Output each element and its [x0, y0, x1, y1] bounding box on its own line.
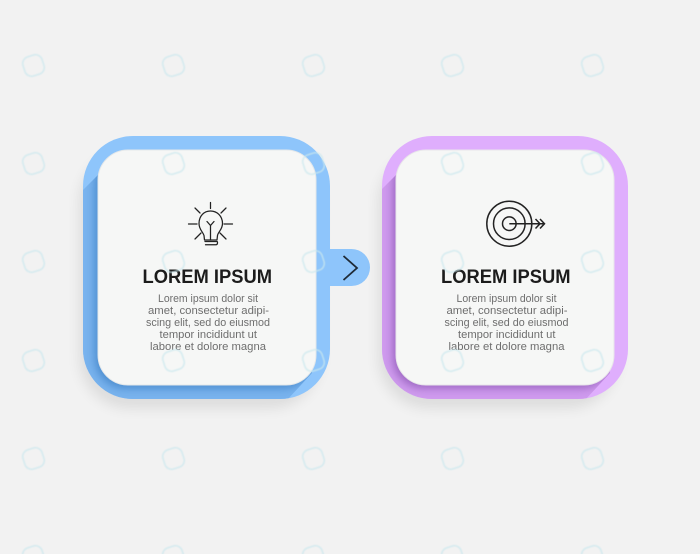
heading: LOREM IPSUM	[441, 267, 570, 288]
purple panel ground shadow	[379, 152, 618, 408]
body text: Lorem ipsum dolor sit	[456, 293, 557, 305]
body text	[444, 293, 569, 353]
watermark grid	[21, 53, 605, 554]
body text: scing elit, sed do eiusmod	[444, 317, 569, 329]
body text: tempor incididunt ut	[160, 329, 257, 341]
panel: blue card	[80, 136, 370, 408]
body text	[146, 293, 270, 353]
blue frame	[83, 136, 330, 399]
blue panel ground shadow	[80, 152, 320, 408]
white card	[98, 150, 316, 385]
panel: purple card	[378, 136, 628, 408]
blue long shadow	[83, 175, 312, 399]
arrow chevron	[344, 256, 357, 280]
white card	[396, 150, 614, 385]
body text: scing elit, sed do eiusmod	[146, 317, 270, 329]
body text: amet, consectetur adipi-	[148, 305, 269, 317]
connector tab	[328, 249, 370, 286]
icon: light bulb	[188, 202, 232, 245]
body text: Lorem ipsum dolor sit	[158, 293, 258, 305]
icon: target with arrow	[487, 201, 544, 246]
body text: tempor incididunt ut	[458, 329, 556, 341]
body text: labore et dolore magna	[150, 341, 266, 353]
heading: LOREM IPSUM	[142, 267, 272, 288]
purple long shadow	[382, 175, 610, 399]
body text: amet, consectetur adipi-	[446, 305, 568, 317]
purple frame	[382, 136, 628, 399]
body text: labore et dolore magna	[448, 341, 565, 353]
